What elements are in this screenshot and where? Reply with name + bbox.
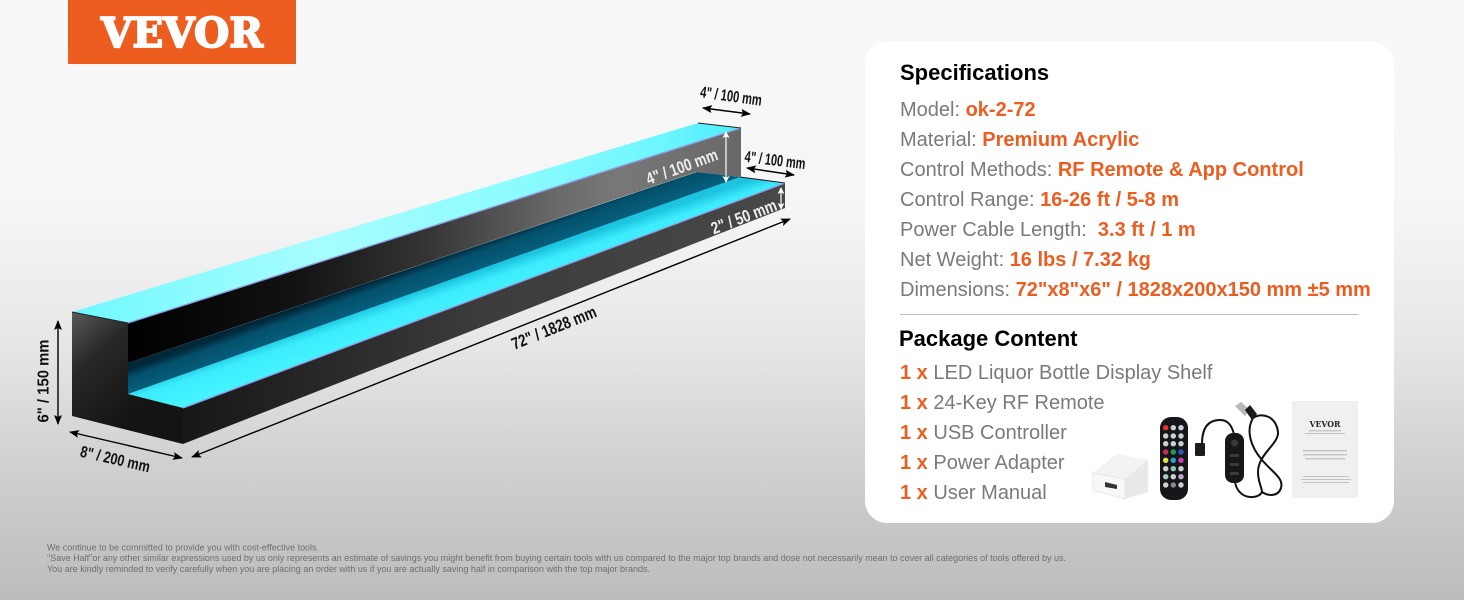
dimension: band height 4 in: 4" / 100 mm bbox=[644, 145, 720, 189]
dimension: top depth 4 in bbox=[699, 84, 763, 114]
item: shelf: 1 x LED Liquor Bottle Display Shelf bbox=[900, 362, 1212, 384]
item: remote: 1 x 24-Key RF Remote bbox=[900, 392, 1105, 414]
icon: RF remote bbox=[1160, 417, 1188, 500]
dimension: height 6 in bbox=[36, 321, 58, 424]
disclaimer text bbox=[47, 542, 1066, 574]
disclaimer text: "Save Half"or any other similar expressions used by us only represents an estimate of savings you might benefit from buying certain tools with us compared to the major top brands and dose not necessarily mean to cover all categories of tools offered by us. bbox=[47, 553, 1066, 563]
logo: VEVOR bbox=[68, 0, 296, 64]
lower shelf front face bbox=[183, 183, 785, 444]
spec: model: Model: ok-2-72 bbox=[900, 99, 1036, 121]
spec: net weight: Net Weight: 16 lbs / 7.32 kg bbox=[900, 249, 1151, 271]
spec: dimensions: Dimensions: 72"x8"x6" / 1828x200x150 mm ±5 mm bbox=[900, 279, 1371, 301]
shelf body bbox=[72, 123, 785, 444]
spec: control methods: Control Methods: RF Remote & App Control bbox=[900, 159, 1304, 181]
upper shelf top surface bbox=[72, 123, 741, 323]
heading: specifications: Specifications bbox=[900, 60, 1049, 85]
icon: power adapter bbox=[1093, 454, 1148, 499]
package accessories illustration bbox=[1092, 401, 1358, 500]
icon: USB controller with cable bbox=[1195, 402, 1281, 497]
disclaimer text: You are kindly reminded to verify carefully when you are placing an order with us if you are actually saving half in comparison with the top major brands. bbox=[47, 564, 650, 574]
dimension: lower depth 4 in bbox=[744, 149, 806, 175]
item: power adapter: 1 x Power Adapter bbox=[900, 452, 1065, 474]
periwinkle edge lines bbox=[128, 128, 785, 408]
back wall glow bbox=[128, 172, 741, 394]
dimension: top depth 4 in: 4" / 100 mm bbox=[699, 84, 763, 110]
spec: power cable length: Power Cable Length: 3.3 ft / 1 m bbox=[900, 219, 1196, 241]
dimension: length 72 in bbox=[192, 219, 790, 457]
dark end edges bbox=[72, 123, 785, 323]
dimension: height 6 in: 6" / 150 mm bbox=[36, 340, 52, 422]
product diagram: L-shaped shelf with dimensions bbox=[36, 84, 806, 476]
upper shelf front band bbox=[128, 128, 741, 363]
dimension: lower depth 4 in: 4" / 100 mm bbox=[744, 149, 806, 173]
heading: package content: Package Content bbox=[899, 326, 1078, 351]
dimension: depth 8 in: 8" / 200 mm bbox=[78, 444, 152, 476]
logo: VEVOR: VEVOR bbox=[100, 9, 264, 57]
spec: material: Material: Premium Acrylic bbox=[900, 129, 1139, 151]
lower shelf top surface bbox=[128, 177, 785, 408]
spec: control range: Control Range: 16-26 ft / 5-8 m bbox=[900, 189, 1179, 211]
item: USB controller: 1 x USB Controller bbox=[900, 422, 1067, 444]
icon: user manual bbox=[1292, 401, 1358, 498]
panel: specifications and package content bbox=[865, 42, 1394, 523]
icon: user manual: VEVOR bbox=[1309, 420, 1341, 430]
dimension: length 72 in: 72" / 1828 mm bbox=[509, 302, 599, 354]
shelf end face bbox=[72, 312, 183, 444]
disclaimer text: We continue to be committed to provide you with cost-effective tools. bbox=[47, 542, 319, 552]
dimension: lip height 2 in: 2" / 50 mm bbox=[708, 196, 780, 238]
dimension: depth 8 in bbox=[70, 432, 182, 476]
item: user manual: 1 x User Manual bbox=[900, 482, 1047, 504]
